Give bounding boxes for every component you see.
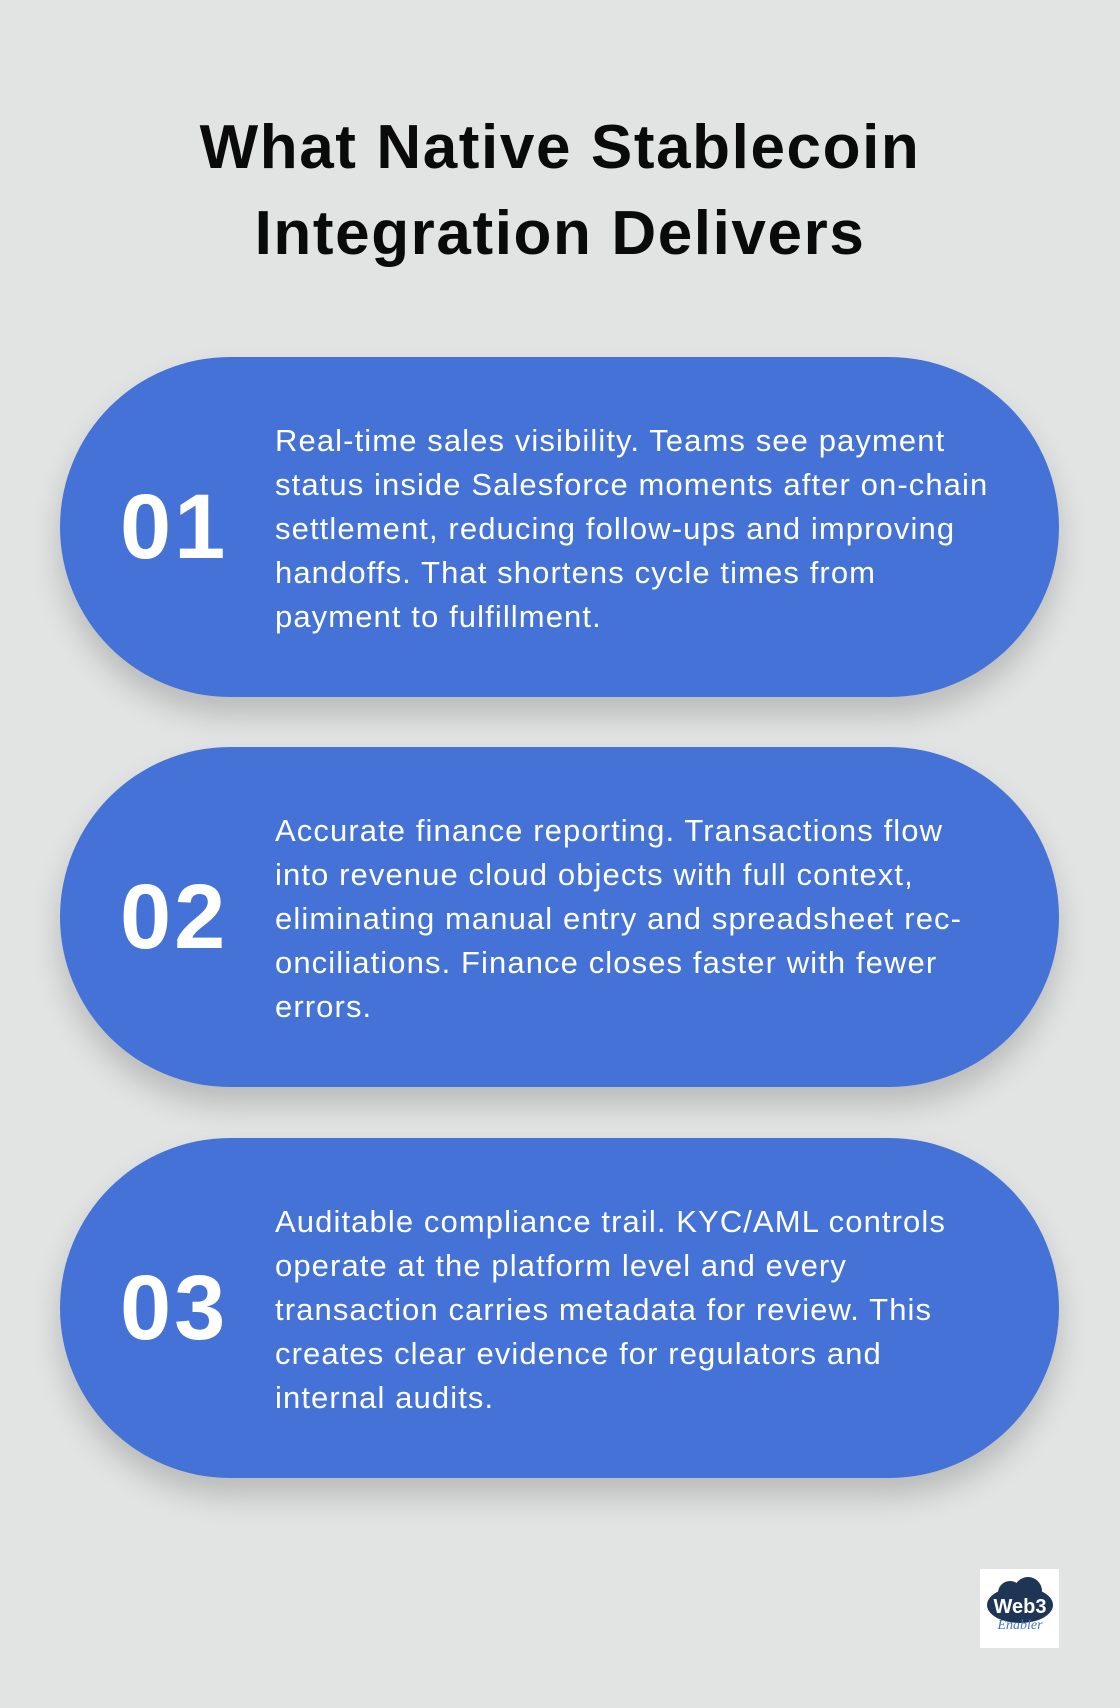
text 01: Real-time sales visibility. Teams see payment bbox=[275, 423, 945, 458]
text 02: eliminating manual entry and spreadsheet rec- bbox=[275, 901, 962, 936]
text 03: Auditable compliance trail. KYC/AML controls bbox=[275, 1204, 946, 1239]
logo: Enabler bbox=[996, 1618, 1043, 1633]
text 01: handoffs. That shortens cycle times from bbox=[275, 555, 876, 590]
text 02: Accurate finance reporting. Transactions flow bbox=[275, 813, 943, 848]
text 03: creates clear evidence for regulators and bbox=[275, 1336, 882, 1371]
logo: Web3 bbox=[994, 1596, 1046, 1618]
number 02: 02 bbox=[120, 866, 228, 968]
text 01 bbox=[275, 423, 988, 634]
text 02: onciliations. Finance closes faster with fewer bbox=[275, 945, 937, 980]
number 01: 01 bbox=[120, 476, 228, 578]
text 03 bbox=[275, 1204, 946, 1415]
title: Integration Delivers bbox=[255, 199, 865, 268]
text 01: status inside Salesforce moments after on-chain bbox=[275, 467, 988, 502]
text 03: operate at the platform level and every bbox=[275, 1248, 847, 1283]
text 01: payment to fulfillment. bbox=[275, 599, 602, 634]
text 03: internal audits. bbox=[275, 1380, 494, 1415]
text 02: into revenue cloud objects with full context, bbox=[275, 857, 914, 892]
panel: 02 bbox=[60, 747, 1059, 1087]
text 01: settlement, reducing follow-ups and improving bbox=[275, 511, 955, 546]
panel: 03 bbox=[60, 1138, 1059, 1478]
title bbox=[200, 113, 920, 268]
text 02: errors. bbox=[275, 989, 372, 1024]
number 03: 03 bbox=[120, 1257, 228, 1359]
panel: 01 bbox=[60, 357, 1059, 697]
title: What Native Stablecoin bbox=[200, 113, 920, 182]
text 03: transaction carries metadata for review. This bbox=[275, 1292, 932, 1327]
logo bbox=[980, 1569, 1059, 1648]
text 02 bbox=[275, 813, 962, 1024]
